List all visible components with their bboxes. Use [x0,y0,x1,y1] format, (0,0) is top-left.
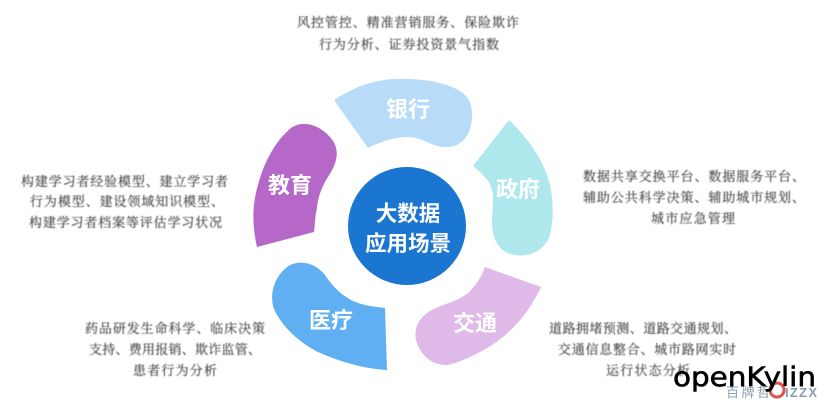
watermark: openKylin: openKylin [673,362,816,393]
panel: medical petal [272,263,387,370]
label: education: 教育 [268,173,312,198]
faint source watermark: 百牌哲 [726,385,770,400]
text block: transport [549,321,737,378]
text block: government [583,169,805,226]
text block: bank [297,15,519,52]
text block: medical: 支持、费用报销、欺诈监管、 [89,342,261,357]
text block: education [21,174,228,230]
center circle: big data application scenarios [348,167,466,285]
text block: education: 行为模型、建设领域知识模型、 [30,194,224,209]
text block: transport: 运行状态分析 [606,363,690,378]
faint source watermark: IZZX [785,385,817,400]
text block: medical [85,321,265,378]
text block: medical: 患者行为分析 [133,363,217,378]
label: bank: 银行 [386,97,430,122]
text block: government: 城市应急管理 [651,211,735,226]
center circle: big data application scenarios: 应用场景 [365,231,451,256]
text block: transport: 道路拥堵预测、道路交通规划、 [549,321,737,336]
text block: education: 构建学习者经验模型、建立学习者 [21,174,228,189]
text block: bank: 行为分析、证券投资景气指数 [319,37,499,52]
label: medical: 医疗 [309,308,353,333]
text block: bank: 风控管控、精准营销服务、保险欺诈 [297,15,519,30]
text block: transport: 交通信息整合、城市路网实时 [558,342,736,357]
text block: government: 辅助公共科学决策、辅助城市规划、 [583,190,805,205]
text block: government: 数据共享交换平台、数据服务平台、 [583,169,805,184]
panel: bank petal [334,79,472,148]
panel: government petal [473,120,553,255]
panel: education petal [253,124,337,247]
center circle: big data application scenarios: 大数据 [376,202,440,226]
faint source watermark [726,383,817,400]
panel: transport petal [415,267,541,365]
text block: medical: 药品研发生命科学、临床决策 [85,321,265,336]
label: transport: 交通 [453,311,497,336]
text block: education: 构建学习者档案等评估学习状况 [29,215,222,230]
label: government: 政府 [496,177,540,202]
